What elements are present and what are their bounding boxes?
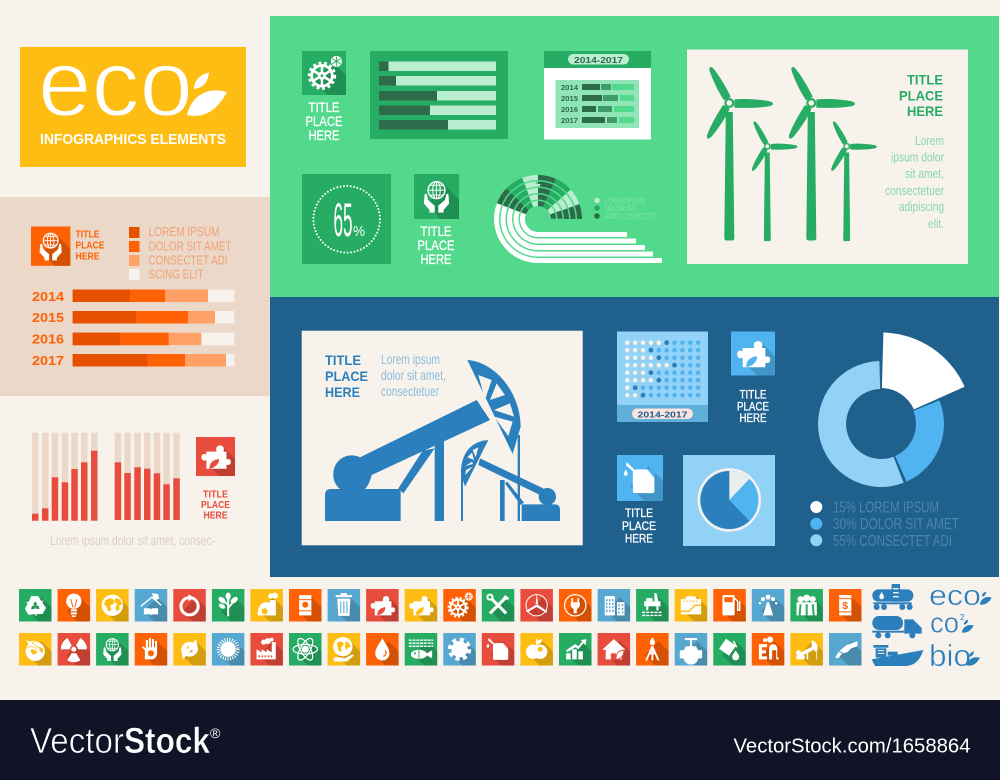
brand word: bio: bio <box>929 638 971 673</box>
panel: green <box>270 16 999 297</box>
horizontal bars chart <box>370 51 508 139</box>
icon: oil can <box>617 455 663 501</box>
calendar bars card <box>544 51 651 140</box>
heading: globe title: PLACE <box>418 237 454 253</box>
icon: radioactive barrel <box>289 589 322 622</box>
icon: earth <box>96 589 129 622</box>
turbine card title: HERE <box>907 103 943 119</box>
icon: fuel pump <box>713 589 746 622</box>
logo panel <box>20 30 246 167</box>
icon: eco house <box>598 633 630 666</box>
legend <box>129 224 232 282</box>
calendar bars card: 2015 <box>561 94 578 103</box>
oil card text: consectetuer <box>381 383 439 399</box>
panel: blue <box>270 297 999 577</box>
icon: apple <box>520 633 553 666</box>
oil card title <box>325 352 368 400</box>
heading: oil can title: HERE <box>625 532 653 546</box>
donut legend: 55% CONSECTET ADI <box>833 533 952 550</box>
radial chart legend: LOREM IPSUM <box>605 196 645 206</box>
icon: valve <box>675 633 707 666</box>
heading: title place here: PLACE <box>76 240 105 252</box>
icon: gear <box>443 633 476 666</box>
stacked bar chart: 2016 <box>32 332 64 347</box>
stacked bar chart <box>32 289 234 368</box>
icon: sync arrows <box>173 633 206 666</box>
icon: hands and globe <box>31 226 70 266</box>
oil pumpjacks illustration <box>325 360 560 521</box>
icon: volcano <box>752 589 784 622</box>
brand word: co2: 2 <box>960 613 965 622</box>
heading: red title: PLACE <box>201 500 230 511</box>
footer brand: Vector <box>30 720 124 761</box>
heading: puzzle title <box>737 390 769 425</box>
calendar bars card: 2014-2017 <box>574 55 623 65</box>
stacked bar chart: 2017 <box>32 353 64 368</box>
dot matrix card: 2014-2017 <box>638 409 688 419</box>
radial chart legend: DOLOR SIT <box>605 203 635 213</box>
footer brand: ® <box>210 725 221 741</box>
oil card text: dolor sit amet, <box>381 367 446 383</box>
donut legend: 30% DOLOR SIT AMET <box>833 516 959 533</box>
oil card text <box>381 351 446 399</box>
icon: recycle <box>19 589 52 622</box>
stacked bar chart: 2014 <box>32 289 65 304</box>
icon: stop hand <box>135 633 167 666</box>
turbine card title: TITLE <box>907 72 943 88</box>
footer brand: Stock <box>124 720 211 761</box>
icon: pumpjack <box>790 633 823 666</box>
oil card title: TITLE <box>325 352 361 368</box>
icon: gear and snowflake <box>302 51 346 95</box>
brand word: eco: eco <box>929 580 981 612</box>
turbine card text: consectetuer <box>885 183 945 198</box>
calendar bars card: 2017 <box>561 116 578 125</box>
icon row 1 <box>19 589 862 622</box>
icon: flare tower <box>636 633 669 666</box>
icon: plane and earth <box>19 633 52 666</box>
heading: red title: TITLE <box>203 490 228 500</box>
icon: oil bucket <box>713 633 746 666</box>
heading: globe title: TITLE <box>420 223 452 239</box>
icon: dollar barrel <box>829 589 862 622</box>
heading: gear title: PLACE <box>306 113 342 129</box>
legend: LOREM IPSUM <box>148 224 220 239</box>
heading: puzzle title: TITLE <box>740 390 767 402</box>
heading: title place here: TITLE <box>76 230 100 240</box>
heading: gear title: TITLE <box>308 99 340 115</box>
icon: earth in hand <box>328 633 360 666</box>
heading: oil can title <box>622 506 656 546</box>
icon: tank wagon <box>872 584 913 610</box>
icon: buildings <box>598 589 630 622</box>
percent gauge <box>302 174 391 264</box>
radial chart legend <box>594 196 656 221</box>
dot matrix card <box>617 332 708 422</box>
oil card title: HERE <box>325 384 360 400</box>
icon: sun <box>212 633 244 666</box>
turbine card text: elit. <box>928 216 944 231</box>
turbine card text: ipsum dolor <box>891 150 945 165</box>
heading: puzzle title: HERE <box>740 413 767 425</box>
icon: cargo ship <box>872 645 923 666</box>
icon: red puzzle <box>196 437 235 476</box>
heading: gear title <box>306 99 342 143</box>
brand word: co2: co <box>930 608 959 640</box>
legend: DOLOR SIT AMET <box>148 238 232 254</box>
icon: dam <box>790 589 823 622</box>
pie chart card <box>683 455 775 546</box>
footer url: VectorStock.com/1658864 <box>734 736 970 758</box>
icon: tanker truck <box>872 616 922 638</box>
icon: tools <box>482 589 514 622</box>
icon: panel <box>675 589 707 622</box>
card: wind turbines <box>687 50 968 264</box>
turbine card text: Lorem <box>915 133 944 148</box>
icon: red puzzle small <box>366 589 399 622</box>
footer bar <box>0 700 1000 780</box>
icon: turbine <box>520 589 553 622</box>
turbine card text: sit amet, <box>905 166 944 181</box>
percent gauge: 65 <box>334 193 352 246</box>
icon: oil can small <box>482 633 514 666</box>
icon: refinery <box>752 633 784 666</box>
icon: factory <box>250 633 283 666</box>
radial sector chart <box>496 177 662 260</box>
donut legend: 15% LOREM IPSUM <box>833 500 939 517</box>
heading: puzzle title: PLACE <box>737 402 769 414</box>
icon: light bulb <box>58 589 90 622</box>
footer brand <box>30 720 221 761</box>
icon: trash can <box>328 589 360 622</box>
turbine card text <box>885 133 945 231</box>
icon: gear and snowflake small <box>443 589 476 622</box>
panel: orange stacked bars <box>0 197 270 396</box>
logo subtitle: INFOGRAPHICS ELEMENTS <box>40 131 226 148</box>
turbine card text: adipiscing <box>899 199 944 214</box>
bar chart: rising red columns <box>32 433 98 521</box>
heading: oil can title: TITLE <box>625 506 653 520</box>
icon: fuel nozzle <box>829 633 862 666</box>
heading: oil can title: PLACE <box>622 519 656 533</box>
donut legend <box>810 500 959 550</box>
calendar bars card: 2016 <box>561 105 578 114</box>
icon: radiation <box>58 633 90 666</box>
icon: oil rig <box>636 589 669 622</box>
turbine card title: PLACE <box>899 88 943 104</box>
icon: hands and globe small <box>96 633 129 666</box>
icon: drop <box>366 633 399 666</box>
turbine card title <box>899 72 943 119</box>
icon row 2 <box>19 633 862 666</box>
icon: growth chart <box>559 633 592 666</box>
heading: red title <box>201 490 230 522</box>
percent gauge: % <box>353 223 365 240</box>
logo word: eco: eco <box>38 30 193 136</box>
icon: nuclear plant <box>250 589 283 622</box>
legend: SCING ELIT <box>148 266 204 282</box>
icon: green hands and globe <box>414 174 459 219</box>
calendar bars card: 2014 <box>561 83 579 92</box>
logo leaves <box>187 72 227 116</box>
icon: refresh circle <box>173 589 206 622</box>
wind turbines illustration <box>704 65 877 241</box>
heading: title place here: HERE <box>76 252 100 262</box>
stacked bar chart: 2015 <box>32 310 64 325</box>
oil card text: Lorem ipsum <box>381 351 440 367</box>
heading: red title: HERE <box>204 510 228 522</box>
icon: plant <box>212 589 244 622</box>
card: oil pumps <box>302 331 583 545</box>
heading: gear title: HERE <box>308 127 340 143</box>
icon: fish and waves <box>405 633 437 666</box>
heading: globe title: HERE <box>420 251 452 267</box>
caption: Lorem ipsum dolor sit amet, consec- <box>50 532 215 548</box>
bar chart: level red columns <box>115 433 180 520</box>
heading: globe title <box>418 223 454 267</box>
oil card title: PLACE <box>325 368 368 384</box>
icon: plug <box>559 589 592 622</box>
legend: CONSECTET ADI <box>148 252 228 268</box>
icon: atom <box>289 633 322 666</box>
icon: axe and logs <box>135 589 167 622</box>
icon: blue puzzle <box>731 332 775 376</box>
heading: title place here <box>76 230 105 262</box>
radial chart legend: AMET CONSECTET <box>605 211 656 221</box>
donut chart <box>818 332 965 487</box>
icon: yellow puzzle small <box>405 589 437 622</box>
